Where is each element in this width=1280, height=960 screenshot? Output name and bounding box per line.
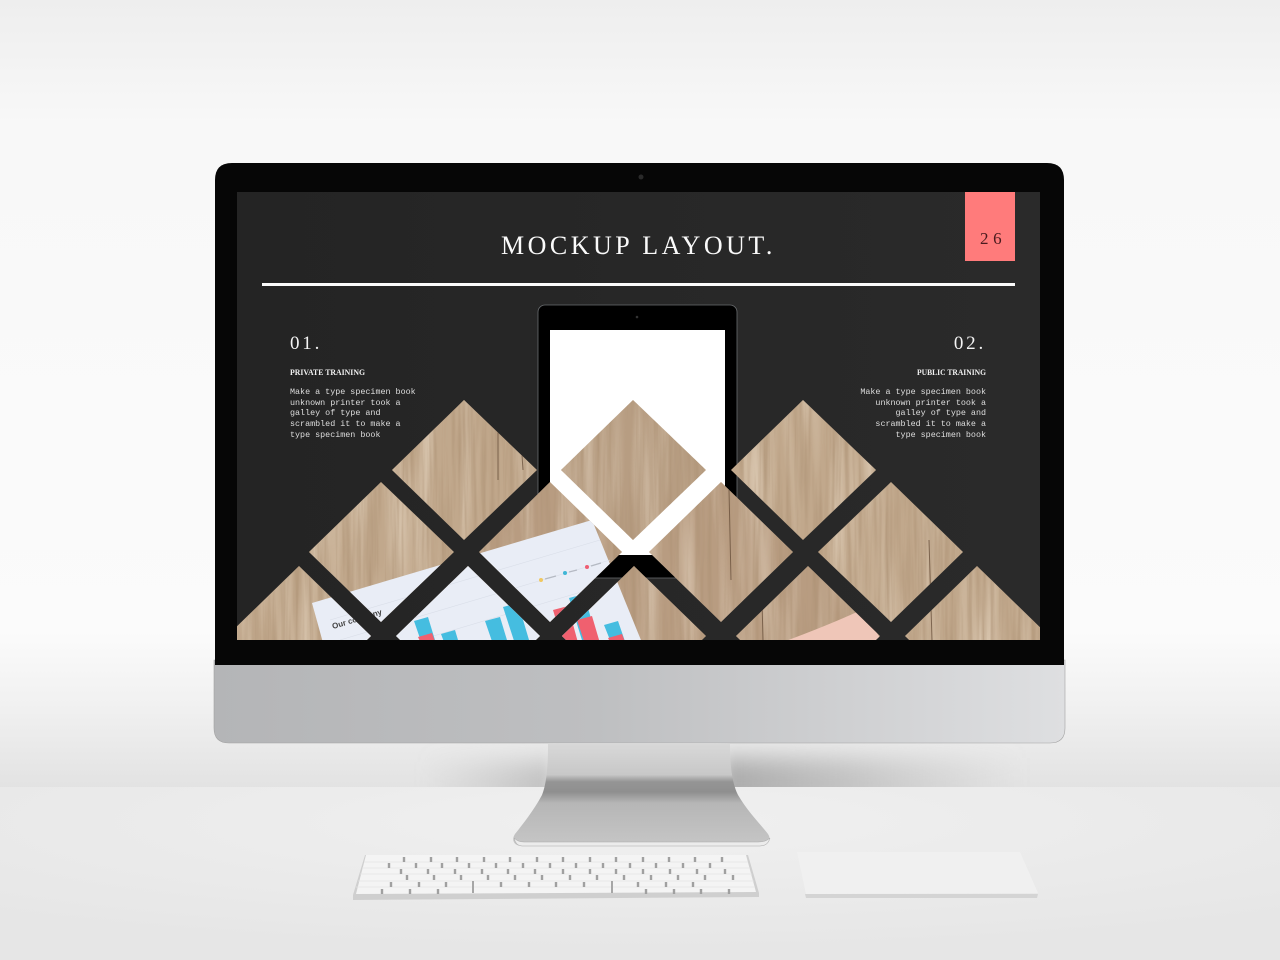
- camera: [638, 174, 644, 180]
- divider: [262, 283, 1015, 286]
- text block: public training: scrambled it to make a: [875, 419, 986, 429]
- text block: public training: 02.: [954, 333, 986, 354]
- desk surface: [0, 787, 1280, 960]
- page number tag: 26: [980, 229, 1006, 248]
- monitor bezel: [215, 163, 1064, 665]
- paper with chart: [312, 520, 645, 650]
- text block: public training: Make a type specimen book: [860, 387, 986, 397]
- text block: public training: unknown printer took a: [875, 398, 986, 408]
- wood photo: [237, 400, 1040, 640]
- text block: private training: [290, 333, 416, 440]
- text block: public training: PUBLIC TRAINING: [917, 367, 986, 377]
- text block: public training: [860, 333, 986, 440]
- slide screen: [237, 192, 1040, 640]
- text block: public training: type specimen book: [896, 430, 986, 440]
- text block: private training: PRIVATE TRAINING: [290, 367, 365, 377]
- monitor: [214, 163, 1065, 743]
- text block: private training: type specimen book: [290, 430, 380, 440]
- title: MOCKUP LAYOUT.: [501, 231, 776, 260]
- page number tag: [965, 192, 1015, 261]
- wall shadow behind stand: [420, 758, 1025, 808]
- monitor stand: [513, 744, 770, 846]
- paper with chart: Our company: [331, 607, 384, 631]
- monitor chin: [214, 660, 1065, 743]
- text block: private training: galley of type and: [290, 408, 380, 418]
- tablet: [538, 305, 737, 578]
- text block: private training: unknown printer took a: [290, 398, 401, 408]
- text block: private training: scrambled it to make a: [290, 419, 401, 429]
- text block: public training: galley of type and: [896, 408, 986, 418]
- keyboard: [353, 855, 759, 900]
- text block: private training: 01.: [290, 333, 322, 354]
- diamond photo mosaic: [237, 400, 1040, 640]
- text block: private training: Make a type specimen book: [290, 387, 416, 397]
- trackpad: [797, 852, 1038, 898]
- hand: [788, 612, 880, 640]
- slide background: [237, 192, 1040, 640]
